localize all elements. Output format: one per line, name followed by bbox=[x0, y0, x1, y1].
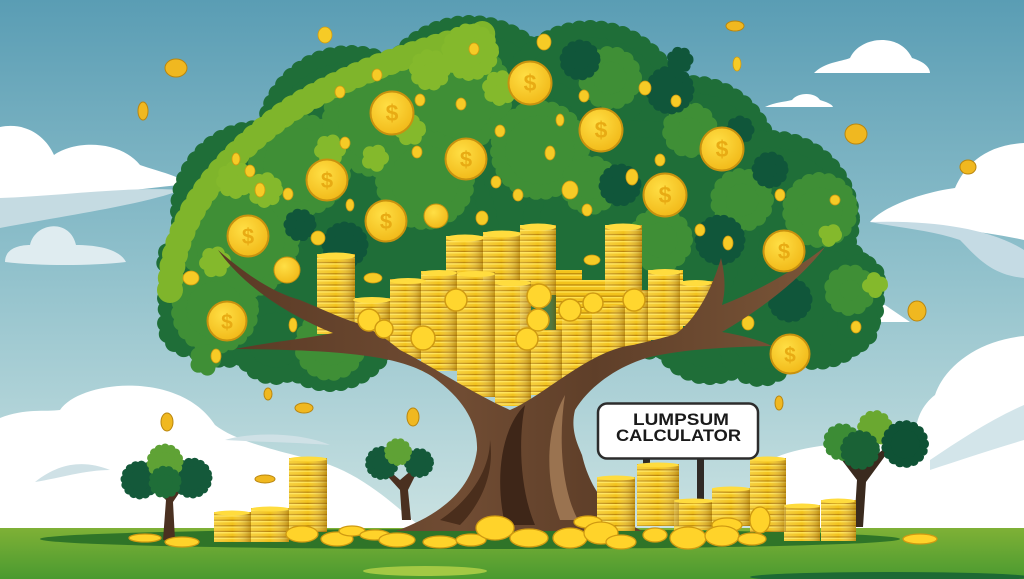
lime leaf patches bbox=[206, 30, 881, 291]
sign: lumpsum calculator: LUMPSUM bbox=[633, 410, 729, 429]
large coins with dollar signs: $ bbox=[659, 182, 672, 208]
loose coins on the ground bbox=[129, 507, 937, 549]
ground coin stacks left bbox=[214, 456, 327, 542]
small tree left bbox=[125, 448, 208, 540]
large coins with dollar signs: $ bbox=[386, 100, 399, 126]
large coins with dollar signs bbox=[208, 62, 810, 374]
large coins with dollar signs: $ bbox=[221, 311, 233, 334]
large coins with dollar signs: $ bbox=[321, 168, 333, 193]
large coins with dollar signs: $ bbox=[242, 224, 254, 249]
tree trunk and branches bbox=[218, 247, 825, 531]
large coins with dollar signs: $ bbox=[784, 344, 796, 367]
clouds: right bbox=[770, 143, 1024, 535]
coins floating outside tree bbox=[138, 21, 976, 483]
large coins with dollar signs: $ bbox=[460, 147, 472, 172]
tree canopy bbox=[165, 24, 881, 383]
central coin stacks bbox=[317, 224, 713, 406]
large coins with dollar signs: $ bbox=[380, 209, 392, 234]
large coins with dollar signs: $ bbox=[778, 239, 790, 264]
floating small coins in canopy bbox=[183, 27, 861, 363]
clouds: left bbox=[0, 126, 188, 265]
clouds: upper right bbox=[765, 40, 930, 107]
lime leaf band along upper left edge bbox=[170, 32, 490, 290]
large coins with dollar signs: $ bbox=[595, 117, 608, 143]
small tree middle bbox=[369, 442, 430, 520]
sign: lumpsum calculator: CALCULATOR bbox=[616, 426, 741, 445]
large coins with dollar signs: $ bbox=[716, 136, 729, 162]
clouds: lower left bbox=[0, 386, 430, 535]
large coins with dollar signs: $ bbox=[524, 70, 537, 96]
signpost posts bbox=[643, 456, 704, 500]
small tree right bbox=[828, 415, 924, 527]
ground coin stacks right bbox=[597, 456, 856, 541]
sign: lumpsum calculator bbox=[598, 404, 758, 458]
ground: grass bbox=[0, 528, 1024, 579]
coins resting on branches bbox=[358, 284, 645, 350]
